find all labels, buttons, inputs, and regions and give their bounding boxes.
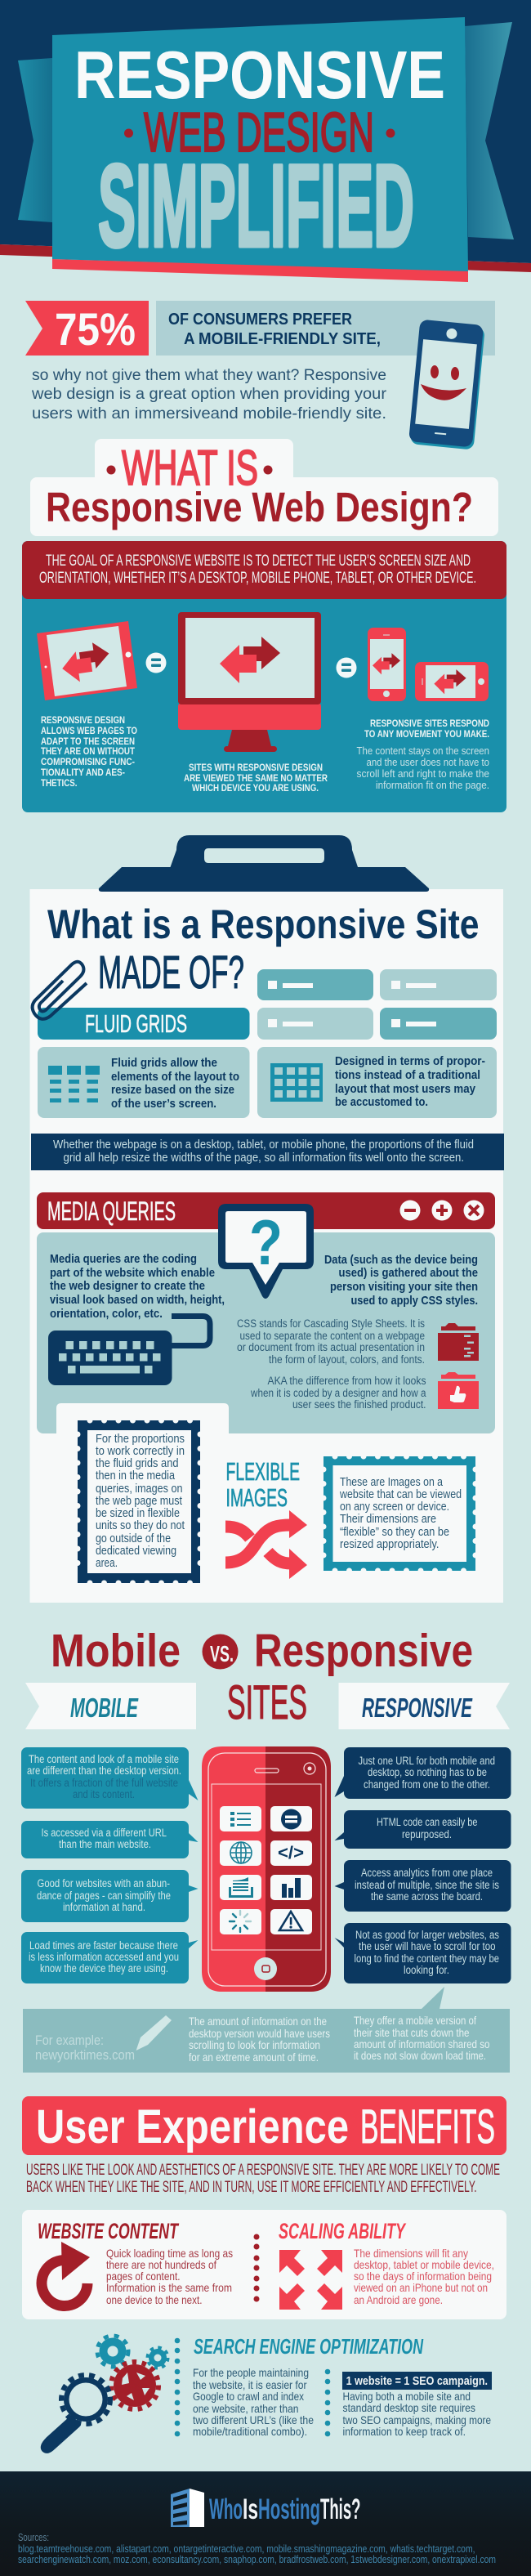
navy stamp: [78, 1420, 200, 1583]
logo wordmark: Hosting: [258, 2493, 320, 2525]
fluid grids bar: [38, 1008, 250, 1040]
seo text left: the website, it is easier for: [193, 2378, 307, 2391]
seo text left: [193, 2366, 314, 2438]
navy stamp: dedicated viewing: [96, 1545, 176, 1558]
flexible images tab: [56, 1403, 229, 1438]
icon: code tag: </>: [278, 1844, 304, 1863]
navy stamp: queries, images on: [96, 1483, 183, 1496]
proportions description: [257, 1047, 497, 1118]
icon: desktop monitor: [178, 612, 321, 752]
website content text: [106, 2247, 233, 2306]
heading: flexible images: IMAGES: [225, 1483, 288, 1512]
data gathered text: used) is gathered about the: [338, 1266, 478, 1280]
css explanation text: used to separate the content on a webpage: [240, 1330, 425, 1342]
website content heading: WEBSITE CONTENT: [38, 2219, 180, 2243]
data gathered text: person visiting your site then: [330, 1280, 478, 1294]
responsive callout 2: [335, 1810, 511, 1849]
responsive callout 4: Not as good for larger websites, as: [355, 1929, 499, 1941]
heading: search engine optimization: SEARCH ENGINE OPTIMIZATION: [194, 2334, 424, 2359]
mobile callout 2: than the main website.: [59, 1838, 151, 1850]
data gathered text: Data (such as the device being: [324, 1253, 478, 1267]
heading: user experience benefits: User Experience: [36, 2100, 349, 2153]
intro text: so why not give them what they want? Responsive: [32, 367, 386, 384]
mobile callout 4: is less information accessed and you: [29, 1951, 179, 1963]
data gathered text: used to apply CSS styles.: [351, 1294, 478, 1308]
title: web design: WEB DESIGN: [144, 101, 374, 163]
heading: what is responsive web design: WHAT IS: [122, 441, 258, 495]
panel: what is a responsive site made of: [29, 835, 504, 1603]
scaling text: viewed on an iPhone but not on: [354, 2281, 488, 2294]
navy note band: [31, 1134, 504, 1170]
proportions description: be accustomed to.: [335, 1095, 428, 1109]
website content text: pages of content.: [106, 2270, 180, 2283]
logo wordmark: [209, 2493, 361, 2525]
css explanation text: the form of layout, colors, and fonts.: [269, 1353, 425, 1366]
media queries title bar: [37, 1192, 495, 1229]
intro text: users with an immersiveand mobile-friendly site.: [32, 405, 386, 423]
example band: For example:: [35, 2033, 104, 2048]
navy stamp: go outside of the: [96, 1532, 171, 1545]
teal stamp: “flexible” so they can be: [340, 1526, 449, 1539]
media queries text: the web designer to create the: [50, 1279, 205, 1293]
seo text right: two SEO campaigns, making more: [343, 2413, 491, 2426]
text: responsive design adapts: TIONALITY AND AES-: [41, 768, 125, 778]
heading: mobile vs responsive sites: Mobile: [51, 1625, 181, 1677]
navy stamp: area.: [96, 1557, 118, 1570]
heading: mobile vs responsive sites: SITES: [227, 1676, 307, 1729]
example band: it does not slow down load time.: [354, 2049, 486, 2062]
website content text: one device to the next.: [106, 2293, 203, 2306]
text: responsive sites respond: and the user does not have to: [366, 757, 489, 768]
stat callout: 75 percent: OF CONSUMERS PREFER: [168, 311, 352, 329]
icon: globe: [230, 1842, 252, 1863]
scaling text: desktop, tablet or mobile device,: [354, 2258, 494, 2271]
text: responsive sites respond: RESPONSIVE SITES RESPOND: [370, 719, 489, 729]
css explanation text: CSS stands for Cascading Style Sheets. It is: [237, 1317, 425, 1330]
icon: spinner: [230, 1911, 251, 1932]
website content text: Quick loading time as long as: [106, 2247, 233, 2260]
stat callout: 75 percent: A MOBILE-FRIENDLY SITE,: [184, 330, 381, 348]
icon: smiling phone: [408, 320, 485, 450]
media queries title bar: MEDIA QUERIES: [47, 1196, 176, 1226]
text: responsive design adapts: ADAPT TO THE SCREEN: [41, 737, 135, 747]
mobile callout 4: [21, 1932, 198, 1983]
text: responsive design adapts: [41, 716, 137, 789]
responsive callout 3: instead of multiple, since the site is: [355, 1879, 499, 1891]
text: responsive design adapts: THEY ARE ON WITHOUT: [41, 747, 135, 757]
icon: expand arrows: [279, 2250, 342, 2310]
panel: what is responsive design: [22, 541, 506, 812]
navy stamp: For the proportions: [96, 1433, 185, 1446]
text: responsive design adapts: COMPROMISING FUNC-: [41, 758, 135, 767]
mobile callout 1: The content and look of a mobile site: [29, 1753, 179, 1765]
navy stamp: then in the media: [96, 1469, 176, 1483]
footer: [0, 2471, 531, 2576]
example band: scrolling to look for information: [189, 2038, 320, 2051]
navy stamp: units so they do not: [96, 1519, 185, 1532]
mobile callout 4: Load times are faster because there: [29, 1939, 178, 1952]
proportions description: layout that most users may: [335, 1082, 476, 1096]
header banner: [0, 0, 531, 282]
seo text left: mobile/traditional combo).: [193, 2425, 307, 2438]
scaling text: an Android are gone.: [354, 2293, 443, 2306]
heading: flexible images: FLEXIBLE: [225, 1457, 300, 1486]
mobile callout 1: are different than the desktop version.: [27, 1764, 181, 1777]
navy stamp: be sized in flexible: [96, 1507, 180, 1520]
example band: desktop version would have users: [189, 2027, 330, 2040]
icon: vertical phone: [368, 628, 406, 701]
app tiles: [220, 1806, 312, 1934]
fluid grids description: resize based on the size: [111, 1083, 234, 1097]
heading: flexible images: [225, 1457, 300, 1512]
mobile callout 3: dance of pages - can simplify the: [37, 1890, 171, 1902]
responsive callout 2: repurposed.: [402, 1828, 452, 1840]
responsive callout 4: looking for.: [404, 1964, 449, 1976]
icon: table grid: [270, 1063, 323, 1102]
heading: mobile vs responsive sites: VS.: [210, 1641, 234, 1666]
seo text left: Google to crawl and index: [193, 2390, 304, 2403]
heading: made of: MADE OF?: [98, 946, 244, 999]
text: responsive design adapts: RESPONSIVE DESIGN: [41, 716, 125, 726]
responsive callout 1: [335, 1747, 511, 1799]
icon: question speech bubble: ?: [249, 1206, 283, 1278]
title: web design: [124, 101, 395, 163]
heading: mobile vs responsive sites: [51, 1625, 473, 1729]
icon: paperclip: [33, 962, 87, 1019]
text: responsive sites respond: information fit on the page.: [376, 780, 489, 791]
teal stamp: These are Images on a: [340, 1476, 444, 1489]
media queries text: Media queries are the coding: [50, 1252, 197, 1266]
mobile callout 1: [21, 1747, 198, 1809]
icon: equals: [281, 1809, 301, 1829]
responsive callout 2: HTML code can easily be: [377, 1816, 477, 1828]
fluid grids description: Fluid grids allow the: [111, 1056, 217, 1070]
website content text: Information is the same from: [106, 2281, 232, 2294]
text: viewed the same: SITES WITH RESPONSIVE DESIGN: [189, 763, 323, 773]
grid tiles: [257, 969, 497, 1040]
responsive callout 1: desktop, so nothing has to be: [368, 1766, 487, 1778]
text: viewed the same: ARE VIEWED THE SAME NO MATTER: [184, 774, 328, 784]
mobile callout 1: It offers a fraction of the full website: [30, 1777, 178, 1789]
media queries panel: [37, 1232, 495, 1433]
clipboard clip: [99, 835, 429, 892]
icon: list: [230, 1812, 251, 1827]
mobile callout 3: [21, 1870, 198, 1922]
aka explanation text: [250, 1375, 426, 1411]
teal stamp: [324, 1456, 475, 1571]
mobile callout 2: Is accessed via a different URL: [41, 1827, 167, 1839]
responsive callout 3: the same across the board.: [371, 1890, 483, 1903]
responsive callout 1: Just one URL for both mobile and: [358, 1755, 495, 1767]
icon: reload arrow: [42, 2242, 90, 2306]
scaling ability heading: SCALING ABILITY: [279, 2219, 407, 2243]
logo wordmark: Who: [209, 2493, 243, 2525]
responsive callout 4: [335, 1923, 511, 1983]
seo text right: information to keep track of.: [343, 2425, 466, 2438]
text: viewed the same: WHICH DEVICE YOU ARE USING.: [192, 784, 319, 794]
mobile callout 1: and its content.: [73, 1788, 135, 1800]
heading: mobile vs responsive sites: Responsive: [254, 1625, 473, 1677]
responsive callout 4: the user will have to scroll for too: [359, 1940, 495, 1952]
navy note band: grid all help resize the widths of the page, so all information fits well onto the screen.: [64, 1152, 464, 1165]
ribbon: responsive: [338, 1683, 510, 1729]
icon: gears and magnifier: [42, 2336, 168, 2452]
seo text right: Having both a mobile site and: [343, 2390, 471, 2403]
sources: [18, 2532, 496, 2565]
example band: for an extreme amount of time.: [189, 2051, 319, 2064]
icon: document tray: [229, 1877, 253, 1898]
seo text right: standard desktop site requires: [343, 2401, 475, 2414]
css explanation text: [237, 1317, 425, 1366]
fluid grids bar: FLUID GRIDS: [85, 1009, 187, 1038]
data gathered text: [324, 1253, 478, 1308]
css explanation text: or document from its actual presentation in: [237, 1341, 425, 1353]
icon: split phone with app tiles: [202, 1746, 331, 1992]
text: responsive sites respond: The content stays on the screen: [356, 745, 489, 757]
panel: benefits: [22, 2210, 506, 2319]
scaling text: [354, 2247, 494, 2306]
logo wordmark: Is: [243, 2493, 258, 2525]
example band: [23, 1987, 510, 2073]
proportions description: Designed in terms of propor-: [335, 1054, 485, 1068]
icon: warning triangle: [279, 1912, 302, 1930]
example band: newyorktimes.com: [35, 2047, 135, 2063]
fluid grids description: elements of the layout to: [111, 1070, 239, 1084]
text: responsive sites respond: scroll left and right to make the: [356, 768, 489, 780]
teal stamp: resized appropriately.: [340, 1538, 440, 1551]
responsive callout 4: long to find the content they may be: [355, 1952, 499, 1965]
heading: what is responsive web design: [30, 439, 498, 536]
heading: user experience benefits: [22, 2096, 506, 2155]
ribbon: mobile: MOBILE: [70, 1693, 139, 1723]
icon: tablet: [37, 621, 137, 700]
example band: They offer a mobile version of: [354, 2014, 476, 2027]
text: viewed the same: [184, 763, 328, 794]
mobile callout 3: Good for websites with an abun-: [38, 1877, 170, 1890]
navy stamp: to work correctly in: [96, 1445, 185, 1458]
seo callout: [342, 2372, 492, 2390]
mobile callout 4: know the device they are using.: [40, 1962, 168, 1974]
teal stamp: website that can be viewed: [339, 1488, 462, 1501]
stat callout: 75 percent: [25, 301, 495, 356]
teal stamp: on any screen or device.: [340, 1500, 449, 1514]
stat callout: 75 percent: 75%: [55, 303, 136, 355]
sources: Sources:: [18, 2532, 49, 2543]
seo text left: For the people maintaining: [193, 2366, 309, 2379]
website content text: there are not hundreds of: [106, 2258, 216, 2271]
text: responsive design adapts: THETICS.: [41, 779, 77, 789]
proportions description: tions instead of a traditional: [335, 1068, 480, 1082]
icon: thumbs up folder: [438, 1372, 479, 1409]
fluid grids description: of the user’s screen.: [111, 1097, 216, 1111]
intro text: web design is a great option when providing your: [31, 386, 387, 403]
navy stamp: the web page must: [96, 1495, 182, 1508]
intro text: [31, 367, 387, 423]
seo text left: one website, rather than: [193, 2402, 299, 2415]
mobile callout 3: information at hand.: [63, 1901, 145, 1913]
example band: their site that cuts down the: [354, 2026, 470, 2039]
responsive callout 3: Access analytics from one place: [361, 1867, 493, 1879]
responsive callout 3: [335, 1860, 511, 1912]
icon: equals sign: [337, 657, 356, 678]
icon: horizontal phone: [415, 662, 489, 701]
scaling text: so the days of information being: [354, 2270, 492, 2283]
benefits intro text: [26, 2162, 500, 2196]
icon: equals sign: [145, 652, 167, 673]
media queries text: [50, 1252, 225, 1321]
title: responsive: RESPONSIVE: [74, 37, 445, 113]
seo text right: [343, 2390, 491, 2438]
ribbon: mobile: [25, 1683, 196, 1729]
goal statement banner: [22, 541, 506, 599]
icon: question speech bubble: [218, 1204, 314, 1299]
text: responsive sites respond: [356, 719, 489, 791]
navy note band: Whether the webpage is on a desktop, tablet, or mobile phone, the proportions of the fluid: [53, 1138, 474, 1152]
aka explanation text: AKA the difference from how it looks: [268, 1375, 426, 1387]
fluid grids description: [38, 1047, 250, 1118]
example band: The amount of information on the: [189, 2015, 327, 2028]
seo callout: 1 website = 1 SEO campaign.: [346, 2374, 488, 2388]
icon: pencil: [136, 2015, 172, 2051]
text: responsive design adapts: ALLOWS WEB PAGES TO: [41, 727, 137, 736]
icon: columns: [48, 1066, 100, 1102]
icon: bar chart: [282, 1878, 301, 1898]
responsive callout 1: changed from one to the other.: [364, 1778, 490, 1791]
mobile callout 2: [21, 1821, 198, 1858]
media queries text: part of the website which enable: [50, 1266, 215, 1280]
media queries text: orientation, color, etc.: [50, 1307, 163, 1321]
logo icon: server building: [171, 2489, 204, 2527]
navy stamp: the fluid grids and: [96, 1457, 178, 1470]
logo wordmark: This?: [320, 2493, 361, 2525]
media queries text: visual look based on width, height,: [50, 1293, 225, 1307]
scaling text: The dimensions will fit any: [354, 2247, 468, 2260]
icon: keyboard: [48, 1316, 210, 1385]
example band: amount of information shared so: [354, 2037, 490, 2051]
icon: red folder: [438, 1323, 479, 1361]
seo text left: two different URL’s (like the: [193, 2413, 314, 2426]
text: responsive sites respond: TO ANY MOVEMENT YOU MAKE.: [364, 730, 489, 740]
aka explanation text: when it is coded by a designer and how a: [250, 1387, 426, 1399]
icon: shuffle arrows: [225, 1510, 307, 1579]
aka explanation text: user sees the finished product.: [292, 1398, 426, 1411]
seo dotted dividers: [175, 2338, 330, 2436]
teal stamp: Their dimensions are: [340, 1513, 436, 1526]
